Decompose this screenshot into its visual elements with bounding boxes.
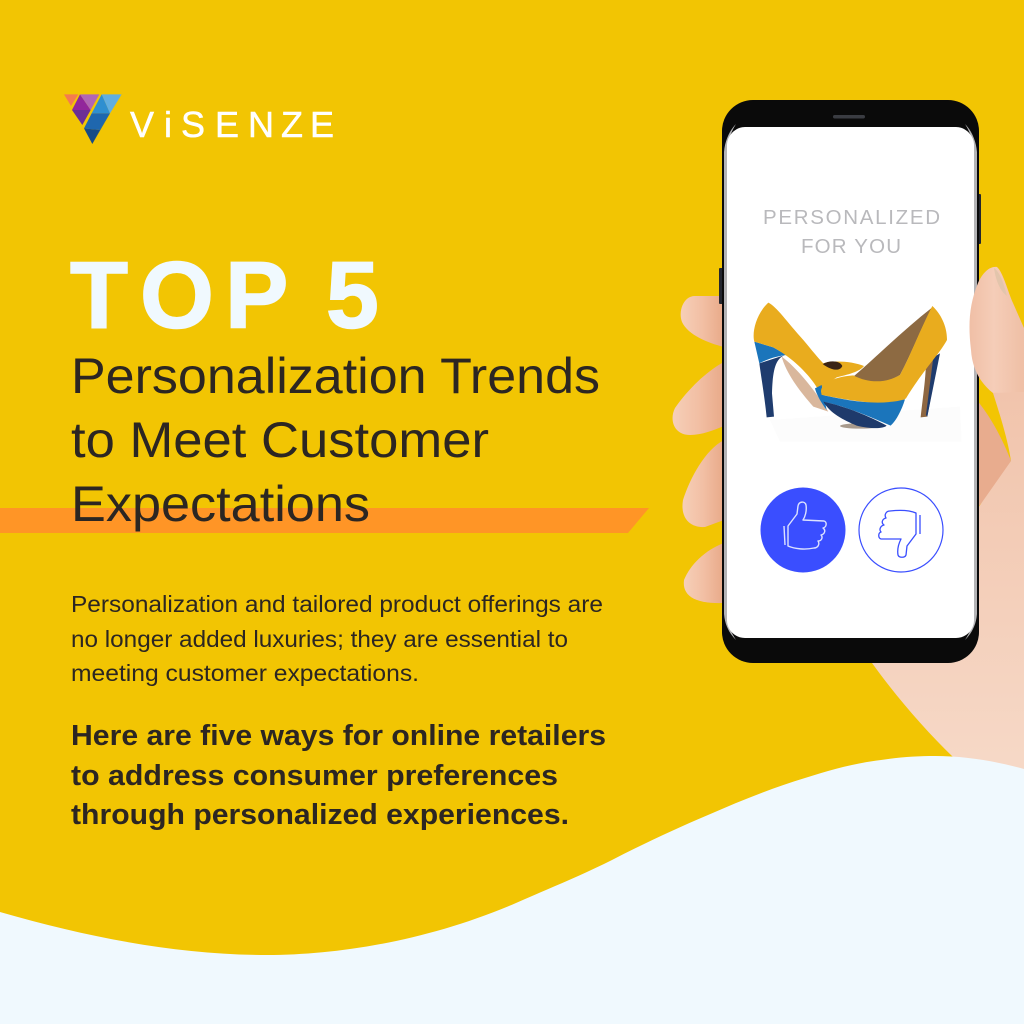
bold callout text: through personalized experiences. (71, 799, 569, 831)
intro paragraph: meeting customer expectations. (71, 660, 419, 686)
heading (71, 348, 600, 532)
left shoe heel (759, 355, 785, 417)
thumbs up button (760, 488, 846, 572)
right shoe heel (921, 355, 938, 417)
right shoe sole (823, 402, 887, 428)
right shoe insole (853, 307, 932, 382)
logo (64, 94, 334, 145)
right shoe upper (821, 306, 947, 403)
screen heading (763, 206, 940, 258)
phone (719, 100, 981, 663)
left shoe sole (782, 357, 828, 412)
left shoe opening (823, 361, 842, 370)
left shoe band under toe (815, 385, 827, 410)
heading: to Meet Customer (71, 412, 489, 468)
bold callout text: Here are five ways for online retailers (71, 720, 606, 752)
phone body (722, 100, 979, 663)
shoes photo (754, 303, 962, 442)
phone screen (727, 127, 974, 638)
right shoe band (822, 395, 905, 426)
screen heading: FOR YOU (801, 235, 901, 258)
icon: thumbs down (879, 510, 920, 557)
logo wordmark: ViSENZE (130, 104, 334, 145)
left shoe band (754, 342, 787, 363)
logo mark (64, 94, 122, 144)
bold callout text (71, 720, 606, 831)
intro paragraph: no longer added luxuries; they are essential to (71, 626, 568, 652)
orange stripe (0, 508, 649, 533)
left shoe upper (754, 303, 864, 390)
phone side buttons (719, 268, 723, 304)
intro paragraph: Personalization and tailored product offerings are (71, 591, 603, 617)
hand: palm (872, 390, 1024, 790)
bold callout text: to address consumer preferences (71, 760, 558, 792)
title: TOP 5: TOP 5 (70, 242, 379, 348)
heading: Personalization Trends (71, 348, 600, 404)
hand: thumb over phone (969, 267, 1024, 393)
thumbs down button (859, 488, 943, 572)
phone bezel highlights (724, 124, 977, 640)
screen heading: PERSONALIZED (763, 206, 940, 229)
thumbnail (994, 268, 1007, 296)
icon: thumbs up (784, 502, 826, 549)
hand: fingers (673, 296, 724, 603)
hand: darker palm side behind thumb (975, 398, 1011, 510)
heading: Expectations (71, 476, 370, 532)
intro paragraph (71, 591, 603, 686)
shoe shadow (770, 407, 962, 442)
phone speaker (833, 115, 865, 118)
wave (0, 756, 1024, 1024)
